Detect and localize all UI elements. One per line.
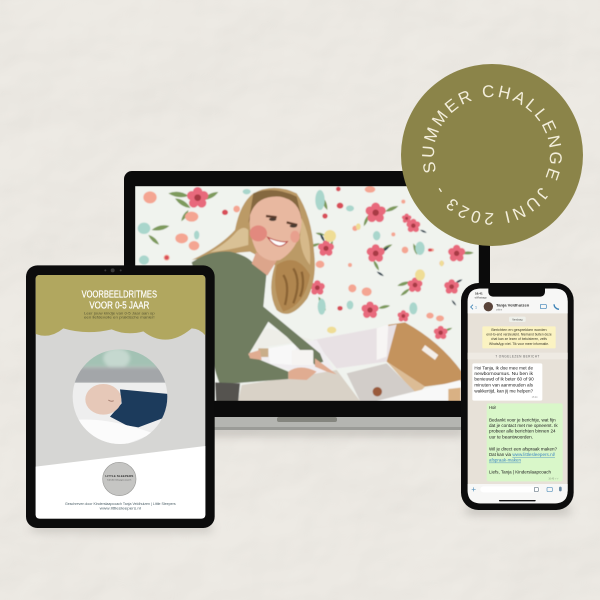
encryption notice: end-to-end versleuteld. Niemand buiten deze — [486, 332, 552, 336]
date pill: Vandaag — [512, 318, 523, 322]
laptop screen: video still — [135, 186, 479, 401]
woman: face — [250, 197, 302, 276]
encryption notice: chat kan ze lezen of beluisteren, zelfs — [491, 337, 547, 341]
outgoing message: Bedankt voor je berichtje, wat fijn — [489, 417, 556, 422]
ebook title: VOORBEELDRITMES — [82, 290, 157, 301]
encryption notice: WhatsApp niet. Tik voor meer informatie. — [489, 342, 549, 346]
chat header: 1 — [475, 306, 477, 310]
outgoing message: Wil je direct een afspraak maken? — [489, 446, 558, 451]
chat header — [468, 288, 568, 313]
encryption notice: Berichten en gesprekken worden — [491, 328, 547, 332]
olive scalloped header — [36, 275, 205, 340]
outgoing message: www.littlesleepers.nl/ — [512, 452, 556, 457]
incoming message — [472, 363, 542, 401]
outgoing message: probeer alle berichten binnen 24 — [489, 429, 556, 434]
phone screen — [468, 289, 568, 503]
device shadows — [32, 427, 570, 531]
floral wallpaper — [138, 186, 474, 342]
laptop lid and bezel — [124, 171, 490, 418]
tablet: ebook cover — [26, 265, 215, 528]
encryption notice — [482, 326, 556, 348]
ebook credits — [65, 502, 176, 510]
incoming message: wakkertijd, kan jij me helpen? — [474, 388, 534, 393]
incoming message: minuten van aanmouden als — [474, 382, 533, 387]
outgoing message: Dat kan via — [489, 452, 512, 457]
crib — [238, 322, 462, 401]
badge: summer challenge: SUMMER CHALLENGE JUNI 2023 - — [422, 85, 562, 225]
ebook subtitle: Leer jouw kindje van 0-5 Jaar aan op — [84, 311, 155, 315]
unread banner — [468, 353, 568, 359]
ebook subtitle: een liefdevolle en praktische manier! — [84, 316, 155, 320]
infographic canvas — [26, 64, 583, 535]
logo badge: kinderslaapcoach — [107, 478, 131, 481]
chat header: Tanja Veldhuizen — [496, 302, 530, 307]
date pill — [509, 317, 526, 322]
ebook credits: Geschreven door Kinderslaapcoach Tanja Veldhuizen | Little Sleepers — [65, 502, 176, 506]
outgoing message: afspraak-maken — [489, 458, 522, 463]
woman: sweater — [192, 251, 323, 384]
ebook subtitle — [84, 311, 155, 320]
chat input bar — [468, 484, 568, 503]
ebook credits: www.littlesleepers.nl — [100, 506, 141, 510]
chat header: 16:41 — [475, 292, 483, 296]
outgoing message: uur te beantwoorden. — [489, 435, 533, 440]
outgoing message: Hoi! — [489, 405, 496, 410]
white footer panel — [36, 446, 205, 519]
tablet body — [26, 265, 215, 528]
laptop base — [124, 417, 490, 430]
outgoing message: dat je contact met me opneemt. Ik — [489, 423, 559, 428]
woman: hands — [248, 350, 337, 380]
phone: WhatsApp chat — [461, 283, 574, 510]
chat header: online — [496, 309, 503, 311]
woman: hair — [192, 188, 315, 314]
tablet screen — [36, 275, 205, 519]
unread banner: 7 ONGELEZEN BERICHT — [495, 354, 539, 358]
incoming message: newbornoursus. Nu ben ik — [474, 371, 534, 376]
ebook title — [82, 290, 157, 312]
outgoing message: Liefs, Tanja | Kinderslaapcoach — [489, 470, 552, 475]
chat header: ◂ Whatsapp — [474, 296, 487, 299]
incoming message: Hoi Tanja, ik doe mee met de — [474, 365, 534, 370]
logo badge — [103, 462, 136, 496]
outgoing message: 16:40 ✓✓ — [548, 477, 559, 480]
baby photo — [72, 350, 168, 444]
phone body — [461, 283, 574, 510]
tablet camera — [104, 268, 122, 272]
outgoing message — [487, 403, 563, 481]
incoming message: 15:44 — [532, 397, 538, 399]
laptop — [124, 171, 490, 430]
logo badge: LITTLE SLEEPERS — [105, 474, 134, 478]
ebook title: VOOR 0-5 JAAR — [89, 301, 149, 312]
incoming message: benieuwd of ik beter 60 of 90 — [474, 377, 534, 382]
badge: summer challenge — [401, 64, 583, 246]
